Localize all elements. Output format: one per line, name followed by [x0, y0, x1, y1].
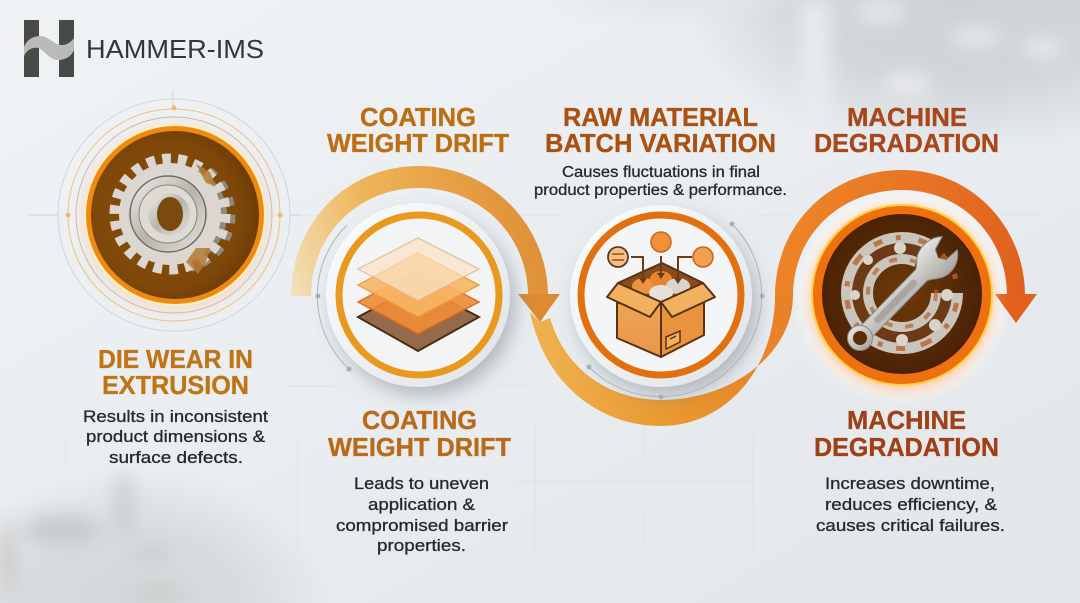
arrow segment: raw material [530, 295, 793, 426]
logo: Hammer-IMS [24, 20, 264, 77]
heading: raw material: RAW MATERIAL [563, 102, 758, 132]
heading: die wear: EXTRUSION [102, 370, 249, 400]
text: die wear description: Results in inconsistent [83, 407, 268, 426]
heading: machine top: MACHINE [847, 102, 967, 132]
heading: coating top [327, 102, 509, 158]
text: coating description [336, 474, 508, 555]
heading: coating bottom: WEIGHT DRIFT [328, 432, 511, 462]
heading: machine top [814, 102, 999, 158]
text: die wear description: surface defects. [109, 448, 243, 467]
text: die wear description: product dimensions & [86, 427, 266, 446]
icon: rusty bearing and wrench in orange ring [808, 204, 996, 392]
text: raw material description: product properties & performance. [534, 182, 787, 199]
heading: coating top: WEIGHT DRIFT [327, 128, 509, 158]
heading: machine bottom: MACHINE [847, 405, 966, 435]
text: coating description: application & [368, 495, 476, 514]
icon: H mark [24, 20, 74, 77]
heading: coating bottom [328, 405, 511, 462]
text: machine description: Increases downtime, [825, 474, 995, 493]
icon: layers in disc [316, 203, 510, 387]
icon: box with materials in disc [570, 205, 764, 400]
icon: worn gear in orange ring [82, 124, 268, 311]
heading: die wear: DIE WEAR IN [98, 344, 253, 374]
material balls [651, 232, 671, 252]
flow ribbon with arrows [291, 166, 1037, 426]
text: raw material description [534, 164, 787, 199]
box interior [618, 263, 703, 302]
heading: coating top: COATING [360, 102, 476, 132]
heading: machine bottom [814, 405, 999, 462]
heading: machine bottom: DEGRADATION [814, 432, 999, 462]
text: machine description: reduces efficiency, & [825, 495, 998, 514]
step 2: coating weight drift [316, 102, 511, 555]
decorative target rings [28, 90, 300, 331]
heading: raw material [545, 102, 776, 158]
step 4: machine degradation [808, 102, 1005, 535]
step 1: die wear [28, 90, 300, 467]
text: machine description [816, 474, 1005, 535]
text: machine description: causes critical failures. [816, 516, 1005, 535]
text: raw material description: Causes fluctuations in final [562, 164, 760, 181]
heading: coating bottom: COATING [362, 405, 477, 435]
text: coating description: properties. [377, 536, 466, 555]
text: coating description: compromised barrier [336, 516, 508, 535]
bearing rings [857, 248, 947, 338]
heading: raw material: BATCH VARIATION [545, 128, 776, 158]
heading: machine top: DEGRADATION [814, 128, 999, 158]
arrow segment: coating [291, 166, 560, 322]
text: die wear description [83, 407, 268, 467]
wrench [837, 231, 965, 360]
logo text: HAMMER-IMS [86, 34, 264, 64]
white halo behind machine icon [800, 193, 1004, 397]
step 3: raw material batch variation [534, 102, 787, 400]
box faces [617, 302, 661, 357]
heading: die wear [98, 344, 253, 400]
arrow segment: machine [775, 170, 1037, 323]
text: coating description: Leads to uneven [354, 474, 489, 493]
arrows into box [631, 256, 692, 280]
